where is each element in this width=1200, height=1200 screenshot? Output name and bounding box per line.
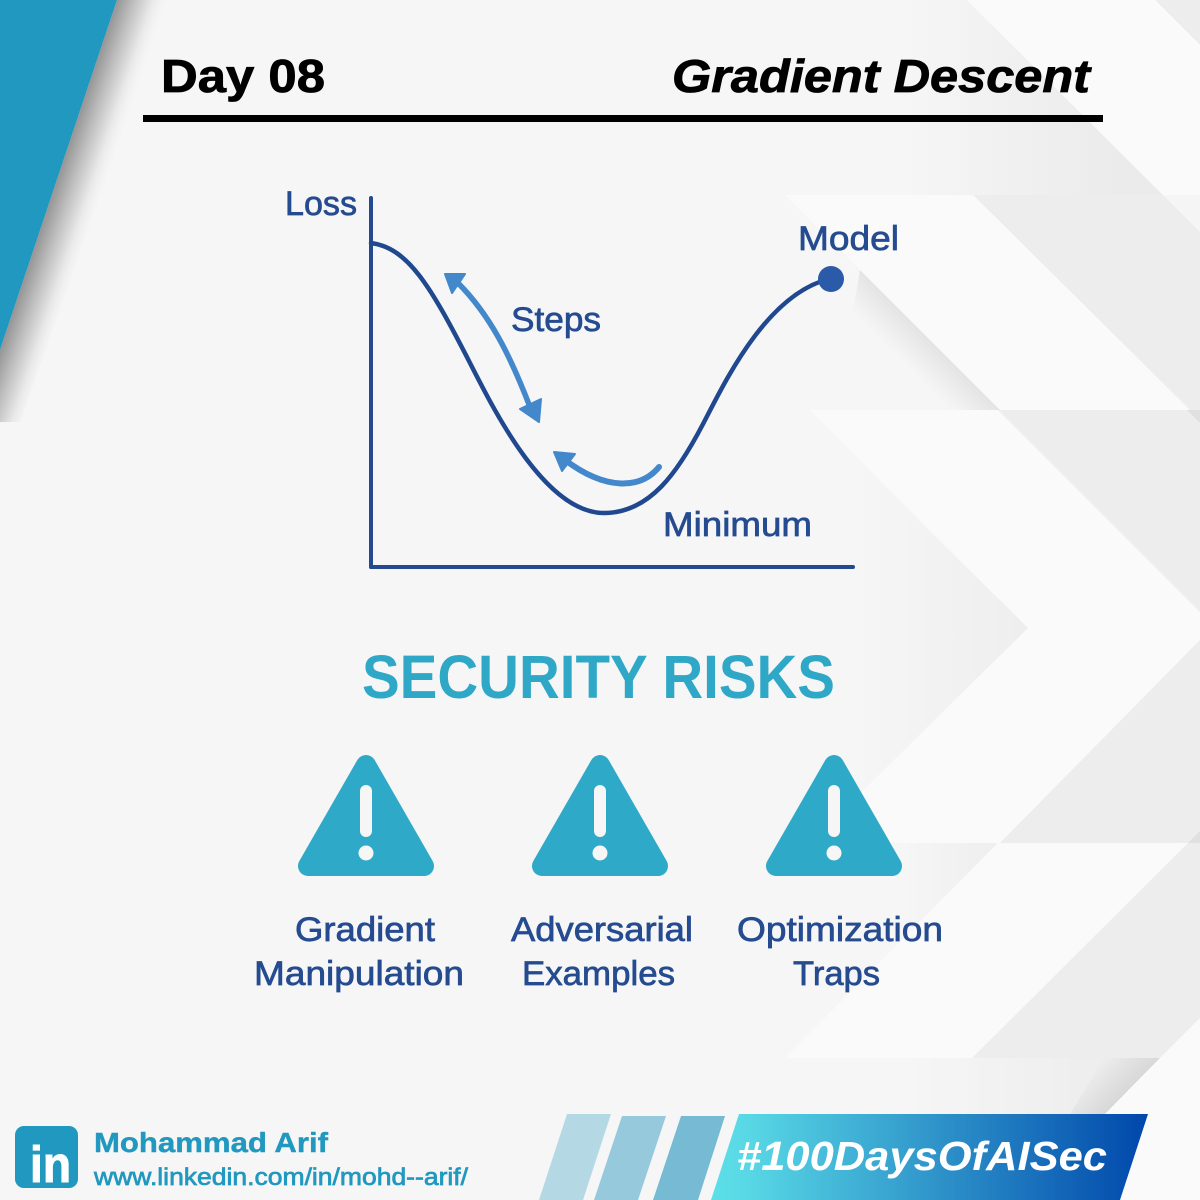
label: Manipulation — [254, 955, 464, 993]
x axis — [371, 565, 853, 569]
stripe three — [653, 1116, 725, 1200]
model marker — [818, 266, 844, 292]
label: Traps — [793, 955, 880, 993]
icon: warning triangle — [542, 765, 658, 866]
risk: adversarial examples — [511, 765, 693, 993]
label: Steps: Steps — [511, 301, 601, 339]
stripe two — [594, 1116, 666, 1200]
icon: linkedin: in — [30, 1136, 71, 1193]
risk: optimization traps — [737, 765, 943, 993]
risk: gradient manipulation — [254, 765, 464, 993]
title: topic: Gradient Descent — [672, 50, 1092, 102]
corner accent with shadow — [0, 0, 170, 422]
label: Gradient — [295, 911, 436, 949]
heading: security risks: SECURITY RISKS — [362, 643, 835, 711]
icon: warning triangle — [776, 765, 892, 866]
label — [254, 911, 464, 993]
y axis — [369, 198, 373, 567]
loss curve line — [371, 243, 829, 513]
label — [511, 911, 693, 993]
label: Examples — [522, 955, 675, 993]
title: day number: Day 08 — [161, 50, 325, 102]
icon: warning triangle — [308, 765, 424, 866]
label: Adversarial — [511, 911, 693, 949]
header rule — [143, 115, 1103, 122]
label — [737, 911, 943, 993]
header — [143, 50, 1103, 122]
label: Optimization — [737, 911, 943, 949]
label: Loss: Loss — [285, 185, 357, 223]
chart: loss curve — [285, 185, 899, 567]
hashtag banner — [539, 1114, 1148, 1200]
arrow: steps down and up — [445, 274, 541, 422]
stripe one — [539, 1114, 611, 1200]
icon: linkedin — [15, 1126, 78, 1193]
label: Model: Model — [798, 220, 899, 258]
banner bar — [711, 1114, 1148, 1200]
author block — [15, 1126, 468, 1193]
profile url: www.linkedin.com/in/mohd--arif/ — [93, 1164, 468, 1191]
author name: Mohammad Arif — [94, 1127, 329, 1158]
arrow: step near minimum — [554, 452, 659, 483]
hashtag text: #100DaysOfAISec — [737, 1133, 1107, 1179]
label: Minimum: Minimum — [663, 506, 812, 544]
